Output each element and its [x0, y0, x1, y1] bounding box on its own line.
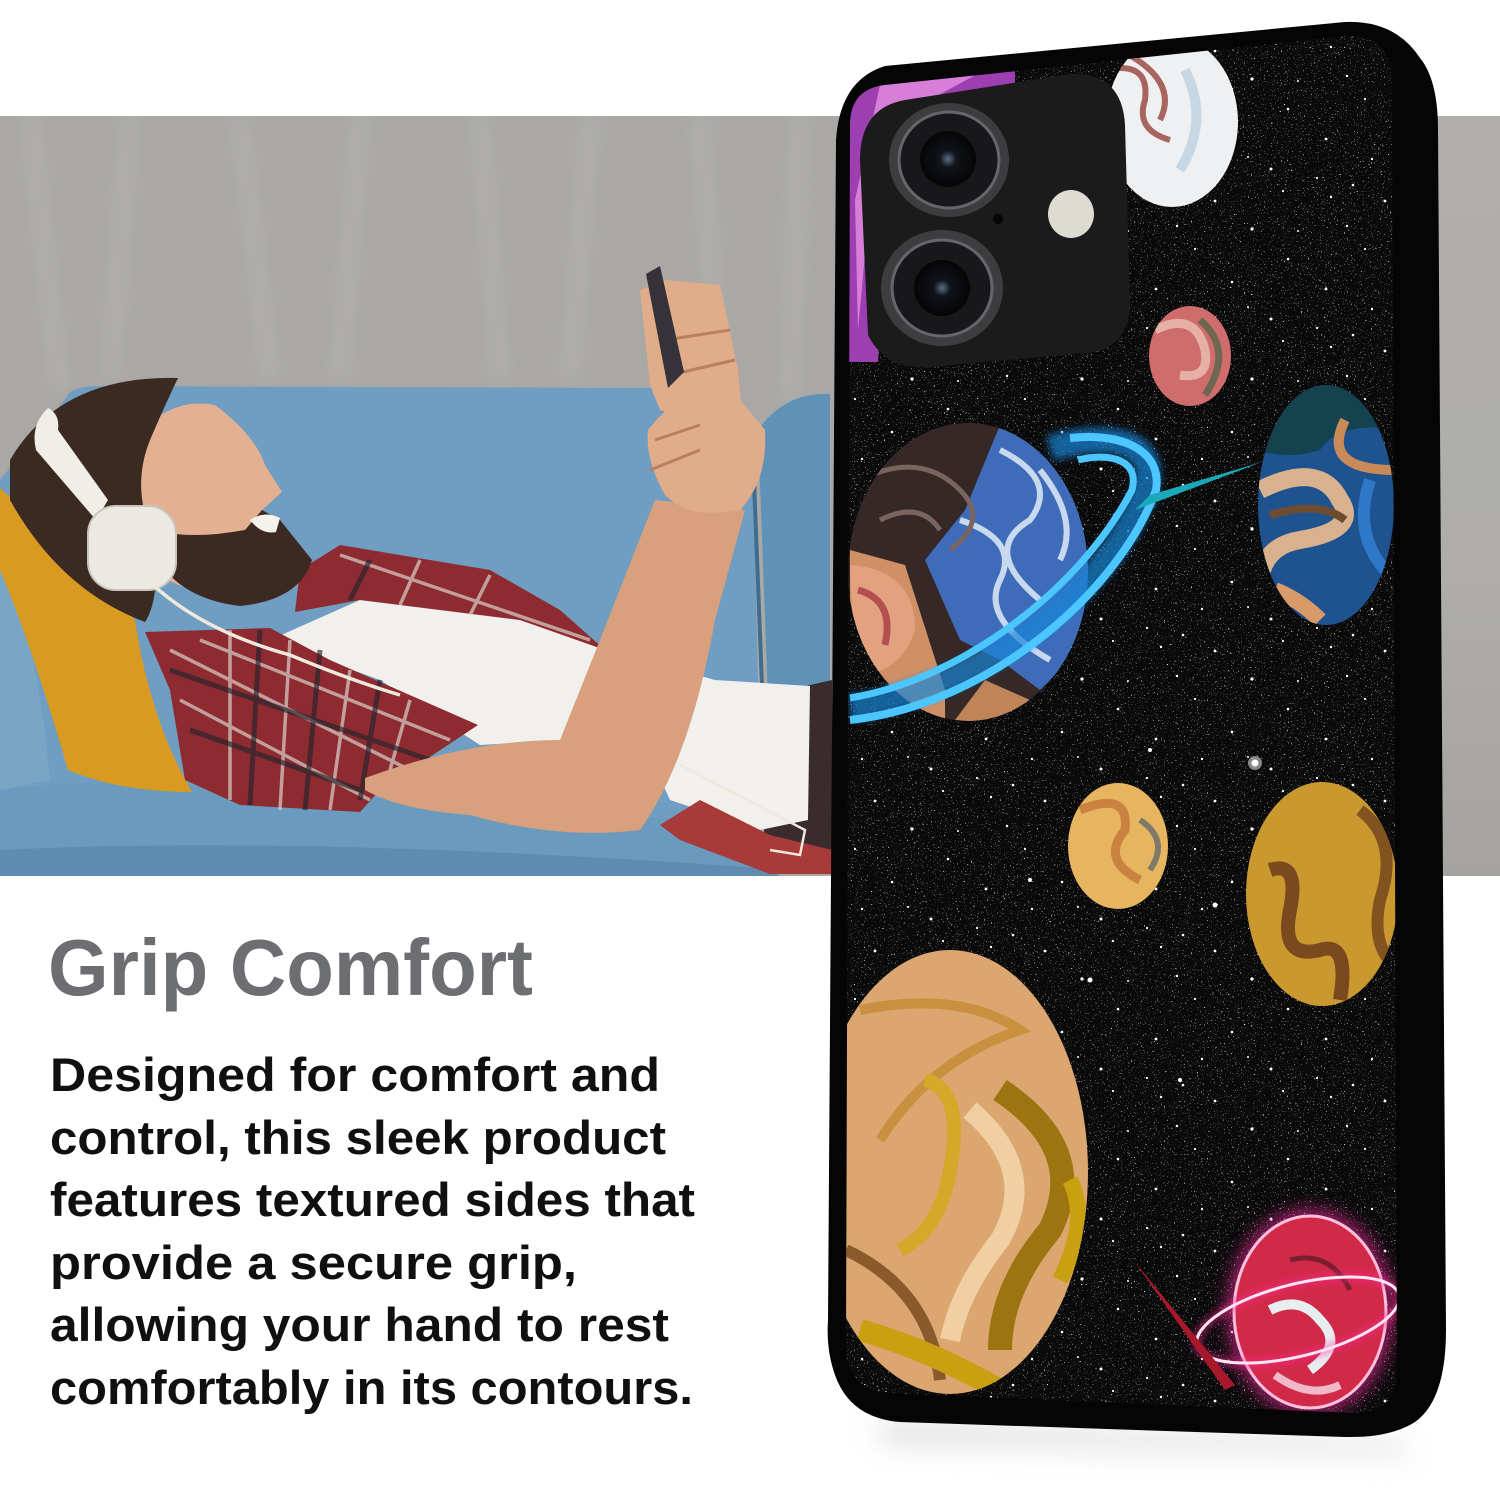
bright stars [1028, 748, 1262, 1082]
sofa [0, 386, 830, 876]
small gold planet [1068, 783, 1168, 909]
large gold marble planet [846, 950, 1088, 1394]
purple corner artwork [846, 60, 1015, 362]
printed space artwork [812, 30, 1410, 1430]
heading: Grip Comfort [48, 923, 533, 1012]
forearm and hands [365, 280, 765, 833]
upper lens [889, 103, 1009, 217]
body text: allowing your hand to rest [50, 1298, 669, 1351]
body text: control, this sleek product [50, 1111, 666, 1164]
neon blue ring [850, 437, 1262, 720]
body text: features textured sides that [50, 1173, 695, 1226]
head and beard [10, 378, 312, 622]
main marble planet [848, 423, 1090, 730]
phone case shadow [870, 1425, 1410, 1452]
headphones [34, 408, 805, 855]
t-shirt [270, 600, 810, 830]
starfield [840, 30, 1410, 1430]
smartphone in hand [646, 266, 684, 388]
ochre planet [1246, 782, 1400, 1006]
body text [50, 1048, 695, 1414]
lifestyle photo: man on sofa [0, 116, 1500, 876]
camera module [860, 74, 1130, 367]
flash [1048, 190, 1094, 238]
lower lens [881, 230, 1003, 346]
body text: Designed for comfort and [50, 1048, 660, 1101]
body text: provide a secure grip, [50, 1236, 577, 1289]
small pink planet [1149, 306, 1231, 406]
black case shell [828, 22, 1446, 1437]
trousers [764, 680, 832, 850]
blue marble planet [1255, 385, 1400, 625]
phone case [812, 22, 1446, 1437]
body text: comfortably in its contours. [50, 1361, 693, 1414]
wall [0, 116, 1500, 876]
neon red ringed planet [1135, 1208, 1408, 1416]
plaid shirt [145, 545, 832, 874]
yellow cushion [0, 488, 192, 792]
white marble planet [1112, 50, 1238, 207]
